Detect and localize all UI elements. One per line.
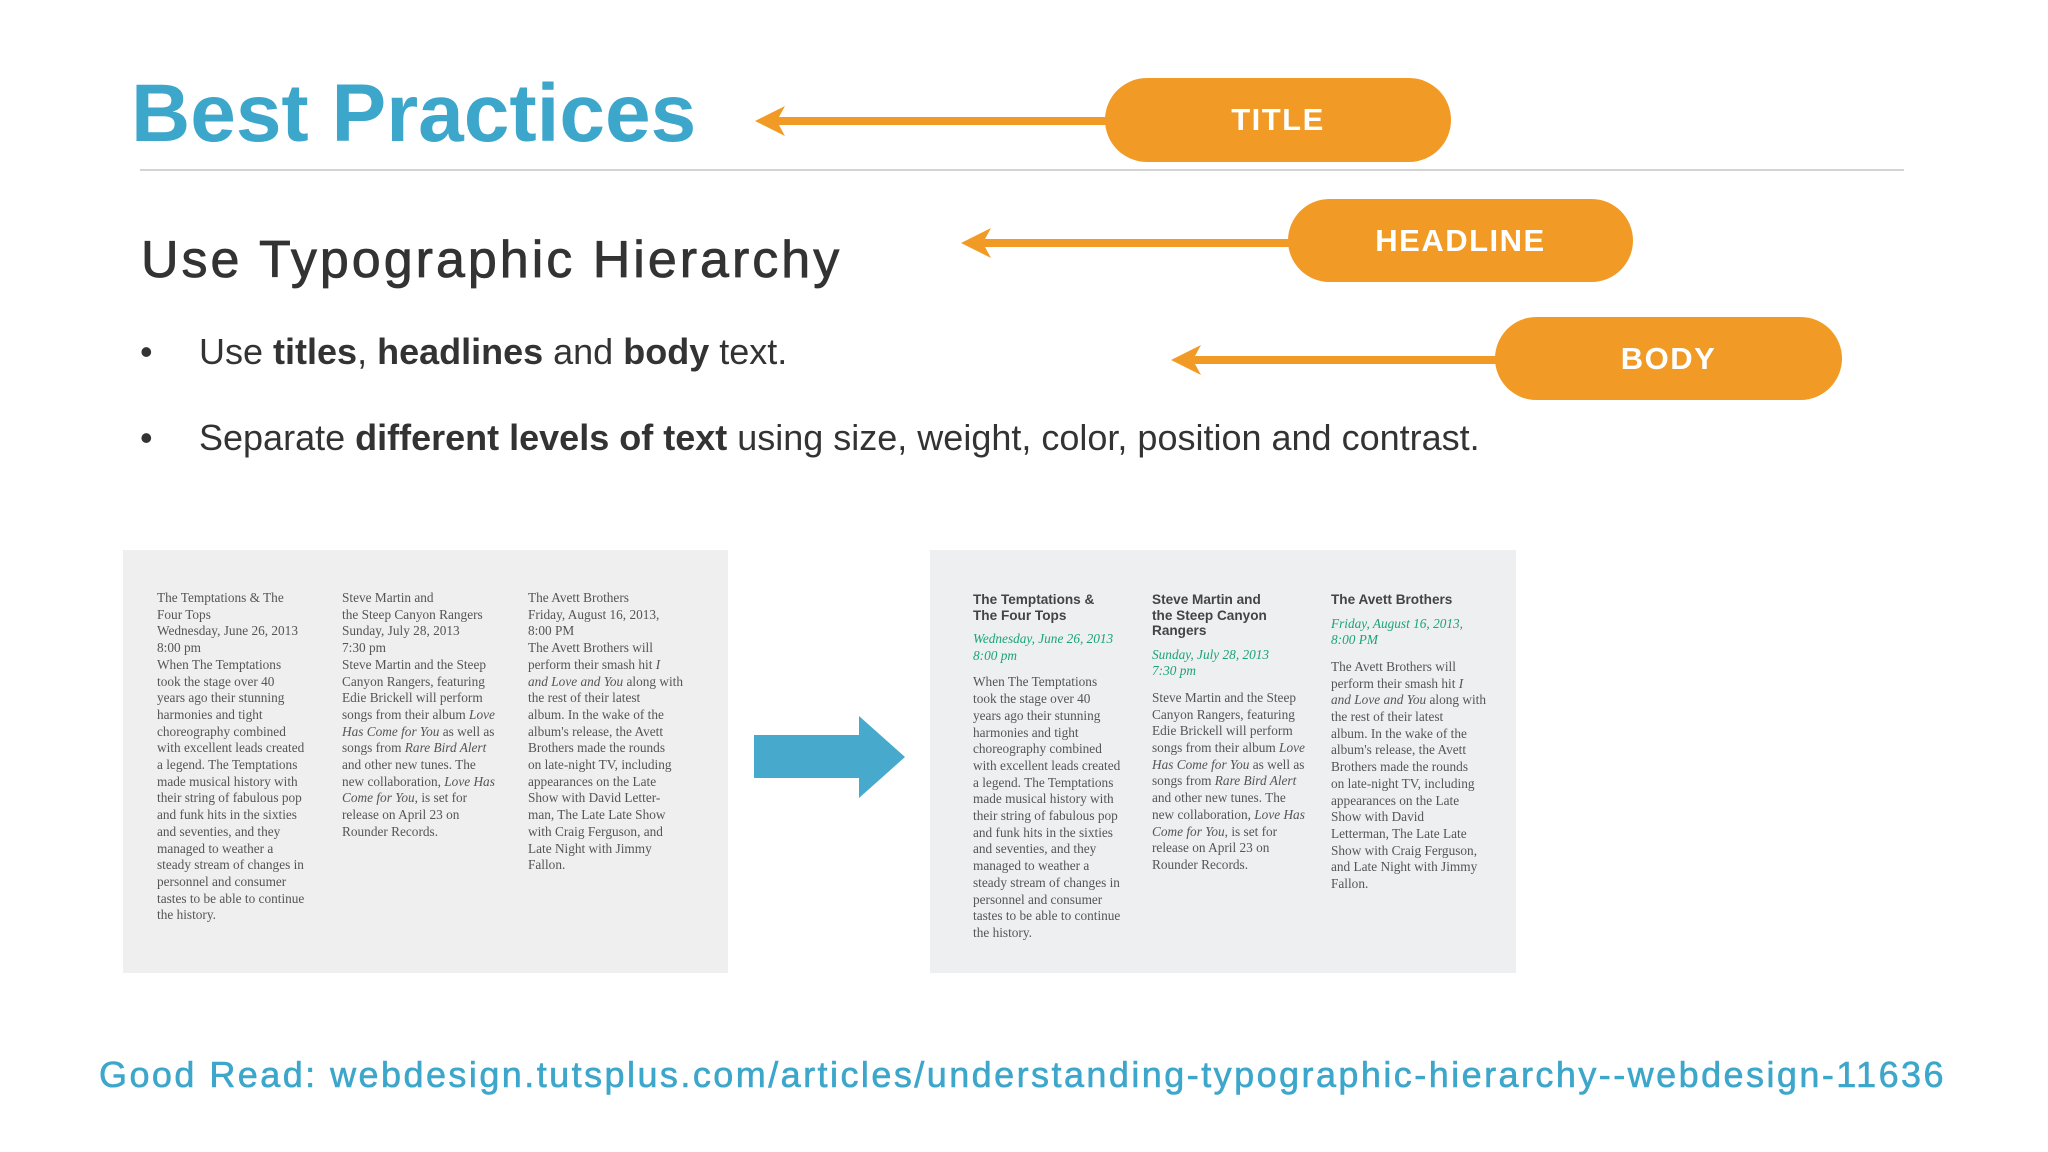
column 1: Four Tops	[157, 607, 211, 622]
column 3: with Craig Ferguson, and	[528, 824, 663, 839]
column 3: The Avett Brothers	[528, 590, 629, 605]
column 3: appearances on the Late	[1331, 793, 1459, 808]
column 2	[342, 590, 495, 839]
column 1	[157, 590, 304, 922]
column 2: songs from their album Love	[1152, 740, 1305, 755]
column 2: Edie Brickell will perform	[1152, 723, 1293, 738]
column 1: choreography combined	[973, 741, 1102, 756]
column 3	[528, 590, 683, 872]
column 2: Come for You, is set for	[1152, 824, 1277, 839]
column 1: The Temptations & The	[157, 590, 284, 605]
column 1: their string of fabulous pop	[973, 808, 1118, 823]
bullet 2: •	[140, 417, 153, 458]
column 1: tastes to be able to continue	[157, 891, 304, 906]
column 3: Late Night with Jimmy	[528, 841, 652, 856]
column 2: Sunday, July 28, 2013	[342, 623, 460, 638]
column 1: harmonies and tight	[973, 725, 1079, 740]
title: Best Practices	[131, 68, 696, 159]
column 1: 8:00 pm	[973, 648, 1017, 663]
column 2: Canyon Rangers, featuring	[1152, 707, 1295, 722]
column 1: years ago their stunning	[157, 690, 284, 705]
column 1: took the stage over 40	[157, 674, 274, 689]
column 1: and seventies, and they	[973, 841, 1096, 856]
column 1: harmonies and tight	[157, 707, 263, 722]
column 1: a legend. The Temptations	[157, 757, 297, 772]
column 3: album's release, the Avett	[528, 724, 663, 739]
column 1: the history.	[157, 907, 216, 922]
panel: before	[123, 550, 728, 973]
column 2: the Steep Canyon	[1152, 608, 1267, 622]
column 3: and Love and You along with	[528, 674, 683, 689]
column 1: and seventies, and they	[157, 824, 280, 839]
column 3: The Avett Brothers	[1331, 592, 1452, 607]
pill: HEADLINE	[1288, 199, 1633, 282]
column 1: Wednesday, June 26, 2013	[973, 631, 1113, 646]
column 3: on late-night TV, including	[1331, 776, 1475, 791]
column 3: The Avett Brothers will	[1331, 659, 1456, 674]
arrow: title	[755, 106, 1106, 136]
column 2: the Steep Canyon Rangers	[342, 607, 483, 622]
column 2: Rangers	[1152, 623, 1206, 638]
column 3: 8:00 PM	[528, 623, 574, 638]
column 2: Come for You, is set for	[342, 790, 467, 805]
column 2: new collaboration, Love Has	[342, 774, 495, 789]
column 1: their string of fabulous pop	[157, 790, 302, 805]
column 1: managed to weather a	[973, 858, 1089, 873]
pill: TITLE: TITLE	[1231, 102, 1325, 137]
bullet 2: Separate different levels of text using size, weight, color, position and contrast.	[199, 417, 1480, 458]
column 1: Wednesday, June 26, 2013	[157, 623, 298, 638]
column 3: and Late Night with Jimmy	[1331, 859, 1477, 874]
column 2: release on April 23 on	[342, 807, 459, 822]
column 1: 8:00 pm	[157, 640, 201, 655]
column 3: and Love and You along with	[1331, 692, 1486, 707]
column 3: Show with Craig Ferguson,	[1331, 843, 1477, 858]
column 2: Steve Martin and	[342, 590, 434, 605]
pill: BODY: BODY	[1621, 340, 1716, 376]
column 3: album. In the wake of the	[1331, 726, 1467, 741]
pill: BODY	[1495, 317, 1842, 400]
column 3: Brothers made the rounds	[528, 740, 665, 755]
column 1: personnel and consumer	[157, 874, 286, 889]
column 3: 8:00 PM	[1331, 632, 1378, 647]
column 1: a legend. The Temptations	[973, 775, 1113, 790]
arrow: headline	[961, 228, 1289, 258]
column 3: Fallon.	[1331, 876, 1368, 891]
column 2: release on April 23 on	[1152, 840, 1269, 855]
column 2: and other new tunes. The	[1152, 790, 1286, 805]
column 1: the history.	[973, 925, 1032, 940]
column 1: The Temptations &	[973, 592, 1094, 607]
column 2: Edie Brickell will perform	[342, 690, 483, 705]
column 2: Canyon Rangers, featuring	[342, 674, 485, 689]
column 3	[1330, 592, 1486, 891]
column 2: 7:30 pm	[1152, 663, 1196, 678]
column 3: Friday, August 16, 2013,	[1331, 616, 1463, 630]
column 3: the rest of their latest	[1331, 709, 1443, 724]
column 1: made musical history with	[157, 774, 298, 789]
column 1: steady stream of changes in	[157, 857, 304, 872]
column 1: steady stream of changes in	[973, 875, 1120, 890]
column 3: appearances on the Late	[528, 774, 656, 789]
column 1: took the stage over 40	[973, 691, 1090, 706]
column 2: 7:30 pm	[342, 640, 386, 655]
bullet 1: •	[140, 331, 153, 372]
column 2: Sunday, July 28, 2013	[1152, 646, 1269, 662]
column 2: and other new tunes. The	[342, 757, 476, 772]
column 3: album's release, the Avett	[1331, 742, 1466, 757]
column 3: Show with David	[1331, 809, 1424, 824]
column 1: with excellent leads created	[973, 758, 1120, 773]
column 3: Friday, August 16, 2013,	[528, 607, 659, 622]
column 1	[973, 592, 1120, 940]
column 1: When The Temptations	[973, 674, 1097, 689]
column 2: songs from Rare Bird Alert	[1152, 773, 1296, 788]
column 3: Brothers made the rounds	[1331, 759, 1468, 774]
column 1: with excellent leads created	[157, 740, 304, 755]
column 1: tastes to be able to continue	[973, 908, 1120, 923]
column 2: songs from Rare Bird Alert	[342, 740, 486, 755]
column 2: Rounder Records.	[1152, 857, 1248, 872]
column 3: on late-night TV, including	[528, 757, 672, 772]
arrow: body	[1171, 345, 1496, 375]
column 2: Steve Martin and the Steep	[1152, 690, 1296, 705]
column 2: Steve Martin and	[1152, 592, 1261, 607]
column 3: perform their smash hit I	[1331, 676, 1463, 691]
column 3: the rest of their latest	[528, 690, 640, 705]
column 3: Fallon.	[528, 857, 565, 872]
column 3: Letterman, The Late Late	[1331, 826, 1467, 841]
column 2: Steve Martin and the Steep	[342, 657, 486, 672]
column 1: managed to weather a	[157, 841, 273, 856]
arrow: blue right	[754, 716, 905, 798]
column 1: choreography combined	[157, 724, 286, 739]
pill: HEADLINE: HEADLINE	[1375, 222, 1546, 258]
column 1: made musical history with	[973, 791, 1114, 806]
column 2: Rounder Records.	[342, 824, 438, 839]
column 3: Show with David Letter-	[528, 790, 660, 805]
column 1: years ago their stunning	[973, 708, 1100, 723]
panel: after	[930, 550, 1516, 973]
column 3: man, The Late Late Show	[528, 807, 665, 822]
column 1: personnel and consumer	[973, 892, 1102, 907]
column 2: Has Come for You as well as	[1152, 757, 1304, 772]
column 3: The Avett Brothers will	[528, 640, 653, 655]
pill: TITLE	[1105, 78, 1451, 162]
column 1: When The Temptations	[157, 657, 281, 672]
column 3: album. In the wake of the	[528, 707, 664, 722]
column 2: Has Come for You as well as	[342, 724, 494, 739]
bullet 1: Use titles, headlines and body text.	[199, 331, 787, 372]
column 1: and funk hits in the sixties	[157, 807, 297, 822]
column 3: perform their smash hit I	[528, 657, 660, 672]
headline: Use Typographic Hierarchy	[141, 231, 842, 289]
column 2: songs from their album Love	[342, 707, 495, 722]
column 1: The Four Tops	[973, 608, 1066, 622]
column 2	[1152, 592, 1305, 872]
column 1: and funk hits in the sixties	[973, 825, 1113, 840]
footer link: Good Read: webdesign.tutsplus.com/articles/understanding-typographic-hierarchy--webdesign-11636	[99, 1054, 1946, 1095]
column 2: new collaboration, Love Has	[1152, 807, 1305, 822]
